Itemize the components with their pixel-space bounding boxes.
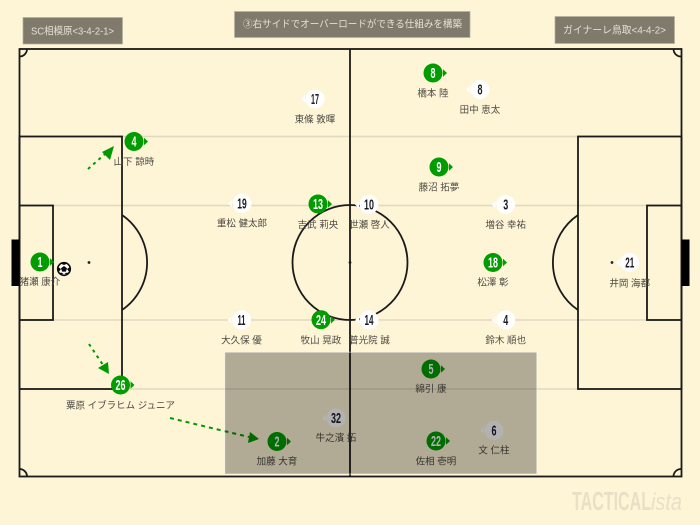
- player: green 24: 24: [316, 313, 326, 329]
- player: white 32: 32: [331, 411, 341, 427]
- player: green 13: 吉武 莉央: [298, 219, 339, 231]
- player: white 10: 世瀬 啓人: [349, 219, 390, 231]
- player: white 6: [478, 421, 510, 456]
- player: white 10: [349, 195, 390, 231]
- player: white 17: [295, 90, 336, 126]
- player: white 11: 大久保 優: [221, 334, 262, 346]
- player: white 21: 井岡 海都: [609, 278, 651, 290]
- left goal: [12, 240, 20, 286]
- player: white 10: 10: [364, 198, 374, 214]
- player: green 5: 5: [428, 362, 434, 378]
- player: white 32: [316, 408, 357, 444]
- right goal: [682, 240, 690, 286]
- player: white 3: 増谷 幸祐: [485, 219, 526, 231]
- player: green 2: 加藤 大育: [257, 456, 297, 468]
- player: green 2: [257, 432, 297, 468]
- player: white 8: 田中 恵太: [460, 104, 501, 116]
- player: green 13: [298, 194, 339, 231]
- player: white 6: 文 仁柱: [478, 444, 510, 456]
- player: green 9: 9: [436, 160, 442, 176]
- heading: title: [234, 12, 470, 38]
- arrow: to number 4: [88, 146, 114, 169]
- watermark: TACTICALista: [572, 486, 682, 516]
- player: white 14: 普光院 誠: [349, 334, 390, 346]
- player: green 5: 綿引 康: [415, 383, 447, 395]
- pitch markings: [20, 49, 682, 476]
- player: white 17: 17: [311, 92, 319, 108]
- arrow: to number 2: [170, 418, 259, 443]
- player: green 4: 4: [132, 135, 136, 151]
- player: green 9: 藤沼 拓夢: [419, 182, 459, 194]
- heading: away team: [555, 16, 674, 44]
- player: white 4: 鈴木 順也: [485, 334, 527, 346]
- player: green 22: 佐相 壱明: [416, 456, 456, 468]
- player: green 13: 13: [313, 197, 323, 213]
- player: white 11: 11: [238, 313, 246, 329]
- heading: home team: [23, 18, 122, 44]
- heading: title: ③右サイドでオーバーロードができる仕組みを構築: [243, 18, 462, 30]
- player: white 19: [217, 194, 268, 230]
- player: green 26: 26: [116, 378, 126, 394]
- player: green 4: [114, 132, 155, 168]
- player: white 17: 東條 敦暉: [295, 114, 336, 126]
- player: green 1: 1: [38, 255, 42, 271]
- player: green 24: 牧山 晃政: [301, 334, 342, 346]
- player: white 8: 8: [478, 83, 482, 99]
- player: green 22: [416, 432, 456, 468]
- player: white 21: 21: [625, 256, 634, 272]
- player: green 26: 粟原 イブラヒム ジュニア: [66, 400, 175, 412]
- player: green 9: [419, 158, 459, 194]
- icon: football: [58, 262, 70, 275]
- player: green 8: 橋本 陸: [417, 88, 449, 100]
- player: green 1: 猪瀬 康介: [20, 276, 61, 288]
- player: white 11: [221, 310, 262, 346]
- player: white 8: [460, 80, 501, 116]
- player: green 18: 18: [488, 256, 498, 272]
- player: green 4: 山下 諒時: [114, 157, 155, 168]
- player: white 32: 牛之濱 拓: [316, 432, 357, 444]
- player: white 4: 4: [503, 313, 508, 329]
- player: white 14: 14: [364, 313, 374, 329]
- player: green 8: 8: [430, 66, 436, 82]
- player: white 19: 重松 健太郎: [217, 218, 268, 230]
- player: green 24: [301, 310, 342, 346]
- heading: home team: SC相模原<3-4-2-1>: [31, 24, 114, 38]
- player: green 26: [66, 376, 175, 412]
- highlighted overload zone: [225, 352, 537, 474]
- player: white 19: 19: [237, 197, 247, 213]
- player: white 6: 6: [492, 424, 496, 440]
- player: white 14: [349, 310, 390, 346]
- arrow: to number 26: [89, 344, 109, 374]
- player: green 22: 22: [431, 434, 441, 450]
- player: green 18: 松澤 彰: [477, 276, 509, 288]
- player: white 4: [485, 310, 527, 346]
- player: green 18: [477, 253, 509, 288]
- player: white 3: 3: [503, 198, 508, 214]
- player: white 3: [485, 195, 526, 231]
- heading: away team: ガイナーレ鳥取<4-4-2>: [563, 24, 666, 36]
- player: green 1: [20, 252, 61, 288]
- player: white 21: [609, 253, 651, 290]
- player: green 2: 2: [274, 435, 280, 451]
- player: green 8: [417, 64, 449, 100]
- player: green 5: [415, 360, 447, 395]
